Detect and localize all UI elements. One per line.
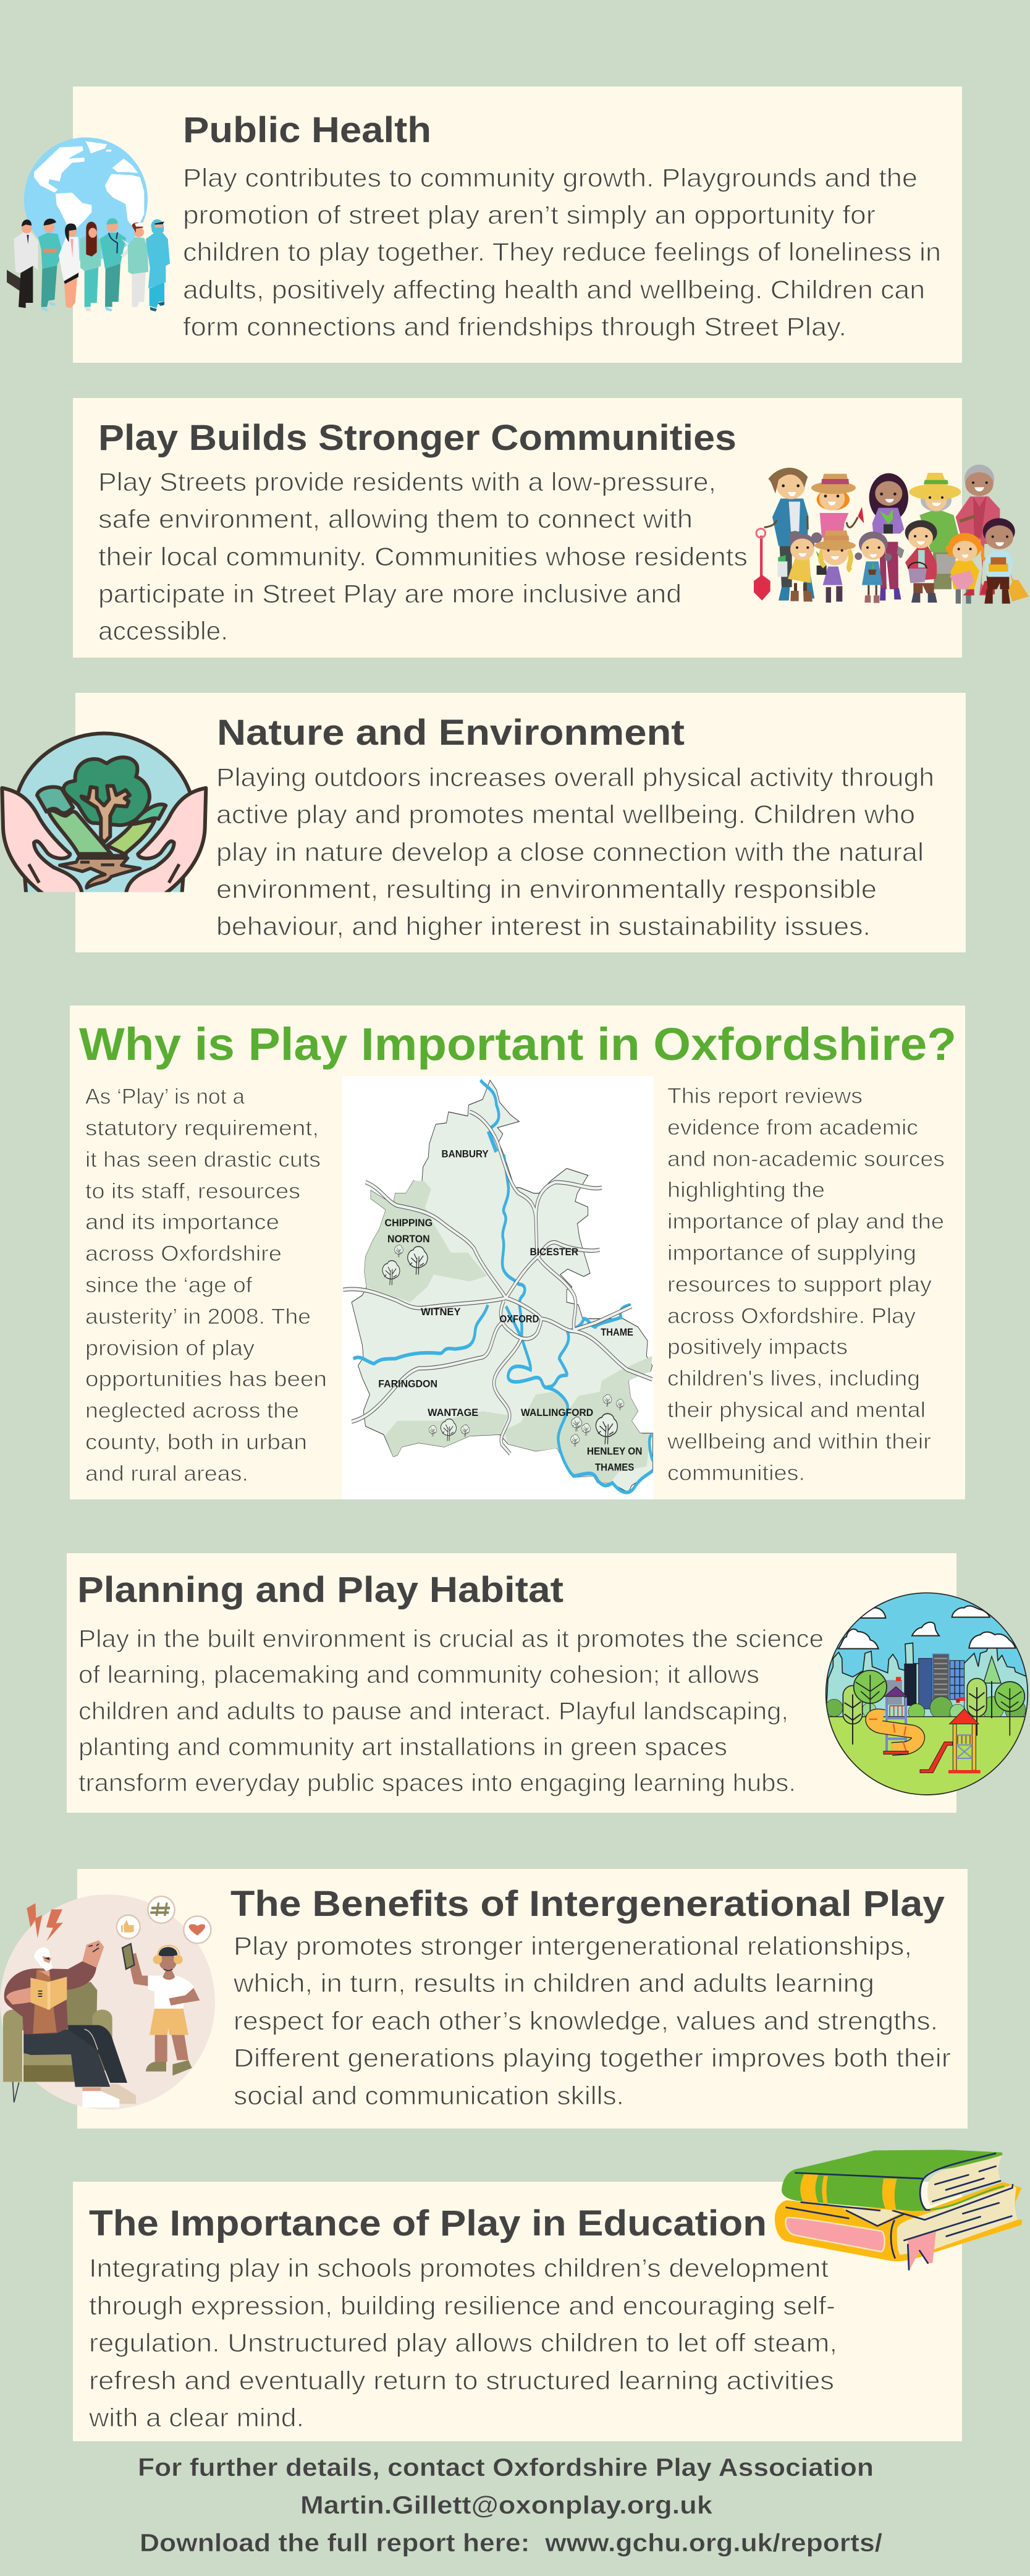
text: public health body xyxy=(183,163,941,341)
person 4 xyxy=(85,267,98,307)
text: intergenerational body: which, in turn, results in children and adults learning xyxy=(233,1968,874,1998)
text: intergenerational body: respect for each other’s knowledge, values and strengths. xyxy=(234,2006,938,2035)
footer: contact details: Martin.Gillett@oxonplay.org.uk xyxy=(300,2491,712,2519)
icon: playground and city xyxy=(824,1593,1030,1797)
text: nature body: behaviour, and higher interest in sustainability issues. xyxy=(216,912,871,941)
back row xyxy=(780,546,792,587)
map: oxfordshire: HENLEY ON xyxy=(587,1446,642,1457)
person 5 xyxy=(105,263,120,307)
person 6 xyxy=(132,271,146,307)
panel: importance of play in education xyxy=(73,2150,1022,2441)
lower book xyxy=(775,2182,1022,2261)
heading: intergenerational play: The Benefits of Intergenerational Play xyxy=(230,1884,945,1924)
icon: community group xyxy=(754,465,1029,604)
heading: why is play important: Why is Play Important in Oxfordshire? xyxy=(79,1019,956,1070)
grandfather xyxy=(68,2025,127,2083)
text: left column xyxy=(85,1085,327,1486)
text: education body: regulation. Unstructured play allows children to let off steam, xyxy=(89,2328,837,2357)
text: stronger communities body: Play Streets provide residents with a low-pressure, xyxy=(98,467,716,496)
map: oxfordshire: WALLINGFORD xyxy=(521,1407,593,1418)
icon: grandfather and child xyxy=(0,1894,215,2109)
text: right column: and non-academic sources xyxy=(667,1147,945,1171)
map: oxfordshire: BANBURY xyxy=(442,1148,489,1160)
text: planning body: transform everyday public spaces into engaging learning hubs. xyxy=(78,1769,796,1797)
text: intergenerational body xyxy=(233,1931,951,2110)
text: left column: austerity’ in 2008. The xyxy=(85,1305,311,1329)
person 1 xyxy=(7,270,27,295)
text: right column: their physical and mental xyxy=(667,1398,926,1422)
upper book xyxy=(782,2150,1003,2211)
map: oxfordshire: CHIPPING xyxy=(385,1218,433,1229)
heading: stronger communities: Play Builds Stronger Communities xyxy=(98,418,737,458)
text: stronger communities body: accessible. xyxy=(98,616,228,645)
text: stronger communities body: participate in Street Play are more inclusive and xyxy=(98,579,682,608)
map: oxfordshire: WANTAGE xyxy=(428,1407,478,1419)
text: intergenerational body: Play promotes stronger intergenerational relationships, xyxy=(234,1931,912,1960)
text: public health body: children to play together. They reduce feelings of loneliness in xyxy=(183,237,941,266)
text: education body: through expression, building resilience and encouraging self- xyxy=(89,2291,835,2320)
text: stronger communities body: their local community. Communities whose residents xyxy=(98,542,748,571)
text: nature body: active play and promotes mental wellbeing. Children who xyxy=(216,800,915,829)
text: right column: importance of play and the xyxy=(667,1210,944,1234)
front row xyxy=(794,583,807,591)
text: left column: to its staff, resources xyxy=(85,1179,300,1203)
panel: nature and environment xyxy=(2,693,966,952)
heading: public health: Public Health xyxy=(183,110,431,150)
footer: contact details: Download the full report here: www.gchu.org.uk/reports/ xyxy=(140,2528,882,2557)
text: planning body: children and adults to pause and interact. Playful landscaping, xyxy=(78,1698,788,1725)
heading: nature and environment: Nature and Environment xyxy=(217,713,685,753)
person 7 xyxy=(150,282,164,308)
map: oxfordshire: FARINGDON xyxy=(378,1378,437,1390)
icon: hands holding tree xyxy=(2,734,206,902)
panel: intergenerational play xyxy=(0,1869,968,2129)
text: right column: evidence from academic xyxy=(667,1116,918,1140)
text: education body: with a clear mind. xyxy=(88,2403,304,2432)
text: right column xyxy=(667,1084,945,1485)
text: nature body: environment, resulting in environmentally responsible xyxy=(216,875,877,904)
text: left column: since the ‘age of xyxy=(85,1273,252,1297)
text: right column: communities. xyxy=(667,1461,805,1485)
person 2 xyxy=(41,264,57,307)
text: public health body: form connections and friendships through Street Play. xyxy=(183,312,846,341)
heading: planning and play habitat: Planning and Play Habitat xyxy=(77,1570,564,1610)
text: right column: resources to support play xyxy=(667,1273,932,1297)
text: right column: importance of supplying xyxy=(667,1241,916,1265)
text: right column: wellbeing and within their xyxy=(667,1430,931,1454)
map: oxfordshire: NORTON xyxy=(387,1234,430,1245)
text: planning body: of learning, placemaking and community cohesion; it allows xyxy=(78,1661,759,1688)
map: oxfordshire: BICESTER xyxy=(530,1247,578,1258)
panel: public health xyxy=(7,87,962,363)
chair xyxy=(14,1982,107,2070)
map: oxfordshire xyxy=(342,1076,653,1499)
panel: planning and play habitat xyxy=(67,1553,1030,1813)
text: right column: positively impacts xyxy=(667,1335,848,1359)
text: right column: This report reviews xyxy=(667,1084,863,1108)
person 3 xyxy=(64,278,77,308)
text: right column: highlighting the xyxy=(667,1178,825,1202)
text: right column: children's lives, including xyxy=(667,1366,920,1391)
panel: play builds stronger communities xyxy=(73,398,1029,658)
footer: contact details xyxy=(138,2453,882,2557)
text: left column: statutory requirement, xyxy=(85,1116,319,1140)
text: education body: refresh and eventually return to structured learning activities xyxy=(89,2366,834,2395)
text: intergenerational body: social and communication skills. xyxy=(234,2081,624,2110)
text: intergenerational body: Different generations playing together improves both their xyxy=(234,2043,951,2072)
panel: why is play important in oxfordshire xyxy=(70,1006,965,1499)
child xyxy=(155,2035,188,2062)
text: left column: opportunities has been xyxy=(85,1367,327,1391)
heading: play in education: The Importance of Play in Education xyxy=(89,2203,767,2243)
text: left column: neglected across the xyxy=(85,1399,299,1423)
map: oxfordshire: THAMES xyxy=(595,1462,634,1473)
text: left column: across Oxfordshire xyxy=(85,1242,282,1266)
footer: contact details: For further details, contact Oxfordshire Play Association xyxy=(138,2453,874,2481)
text: stronger communities body xyxy=(98,467,748,645)
text: left column: provision of play xyxy=(85,1336,255,1360)
map: oxfordshire: THAME xyxy=(601,1326,633,1338)
text: public health body: promotion of street play aren’t simply an opportunity for xyxy=(183,200,876,229)
text: left column: As ‘Play’ is not a xyxy=(85,1085,245,1109)
text: public health body: Play contributes to community growth. Playgrounds and the xyxy=(183,163,918,192)
text: planning body xyxy=(78,1625,824,1797)
text: nature body xyxy=(216,763,934,941)
text: public health body: adults, positively affecting health and wellbeing. Children can xyxy=(183,275,925,304)
text: education body: Integrating play in schools promotes children’s development xyxy=(89,2253,829,2282)
text: left column: county, both in urban xyxy=(85,1430,307,1454)
text: left column: and its importance xyxy=(85,1210,279,1234)
icon: stack of books xyxy=(775,2150,1022,2270)
text: planning body: Play in the built environment is crucial as it promotes the science xyxy=(78,1625,824,1653)
text: left column: it has seen drastic cuts xyxy=(85,1148,321,1172)
icon: globe and health workers xyxy=(7,137,170,311)
text: education body xyxy=(88,2253,837,2432)
text: planning body: planting and community art installations in green spaces xyxy=(78,1734,727,1761)
map: oxfordshire: WITNEY xyxy=(421,1306,461,1318)
text: nature body: play in nature develop a close connection with the natural xyxy=(216,837,924,866)
map: oxfordshire: OXFORD xyxy=(500,1313,539,1325)
text: right column: across Oxfordshire. Play xyxy=(667,1304,916,1328)
text: left column: and rural areas. xyxy=(85,1462,248,1486)
text: stronger communities body: safe environment, allowing them to connect with xyxy=(98,504,693,533)
text: nature body: Playing outdoors increases overall physical activity through xyxy=(216,763,934,792)
